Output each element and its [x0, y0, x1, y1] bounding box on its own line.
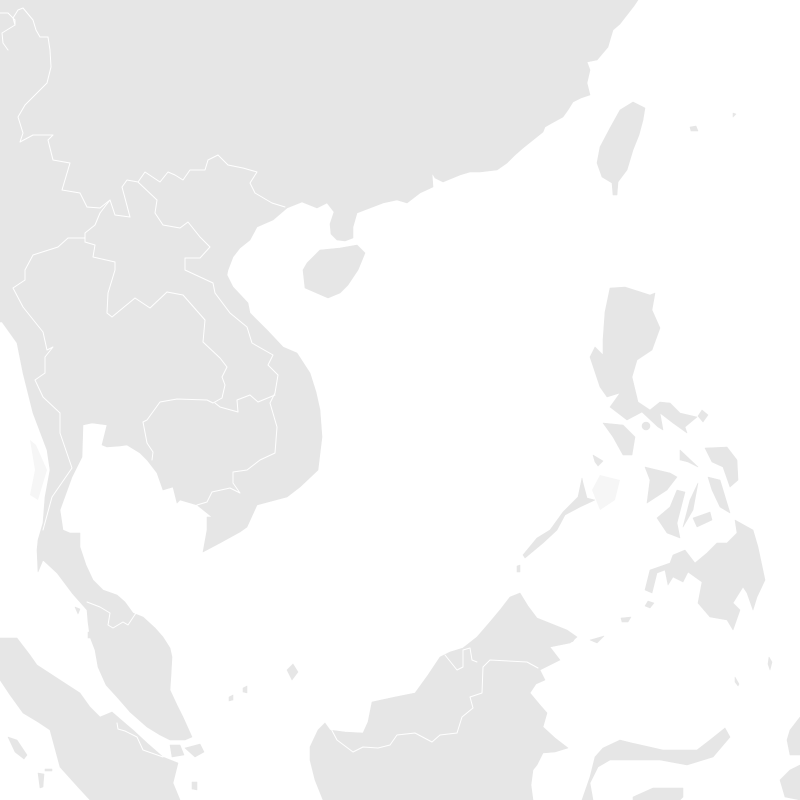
island: Halmahera: [787, 717, 800, 755]
island: Catanduanes: [698, 410, 708, 422]
island: Masbate: [680, 450, 698, 467]
island: Sumatra: [0, 638, 180, 800]
island: Marinduque: [642, 422, 650, 430]
island: Samar: [705, 447, 738, 487]
island: Sulawesi southeast arm: [633, 788, 683, 800]
mainland Asia: China, Myanmar, Thailand, Laos, Vietnam, Cambodia, Malaysia: [0, 0, 638, 740]
island: Negros: [657, 490, 685, 538]
island: Mindanao: [645, 520, 765, 630]
country borders: [0, 8, 538, 757]
island: Leyte: [708, 477, 730, 513]
island: Taiwan: [597, 102, 645, 195]
island: Hainan: [303, 245, 365, 298]
island: Bohol: [693, 512, 712, 527]
island: Sulawesi: [582, 728, 730, 800]
island: Mindoro: [603, 423, 635, 455]
island: Palawan: [523, 478, 595, 558]
island: Borneo: [310, 593, 577, 800]
island: Cebu: [683, 483, 698, 527]
island: eastern outliers: [780, 765, 800, 800]
island: Luzon: [590, 287, 697, 433]
island: Panay: [645, 467, 677, 503]
